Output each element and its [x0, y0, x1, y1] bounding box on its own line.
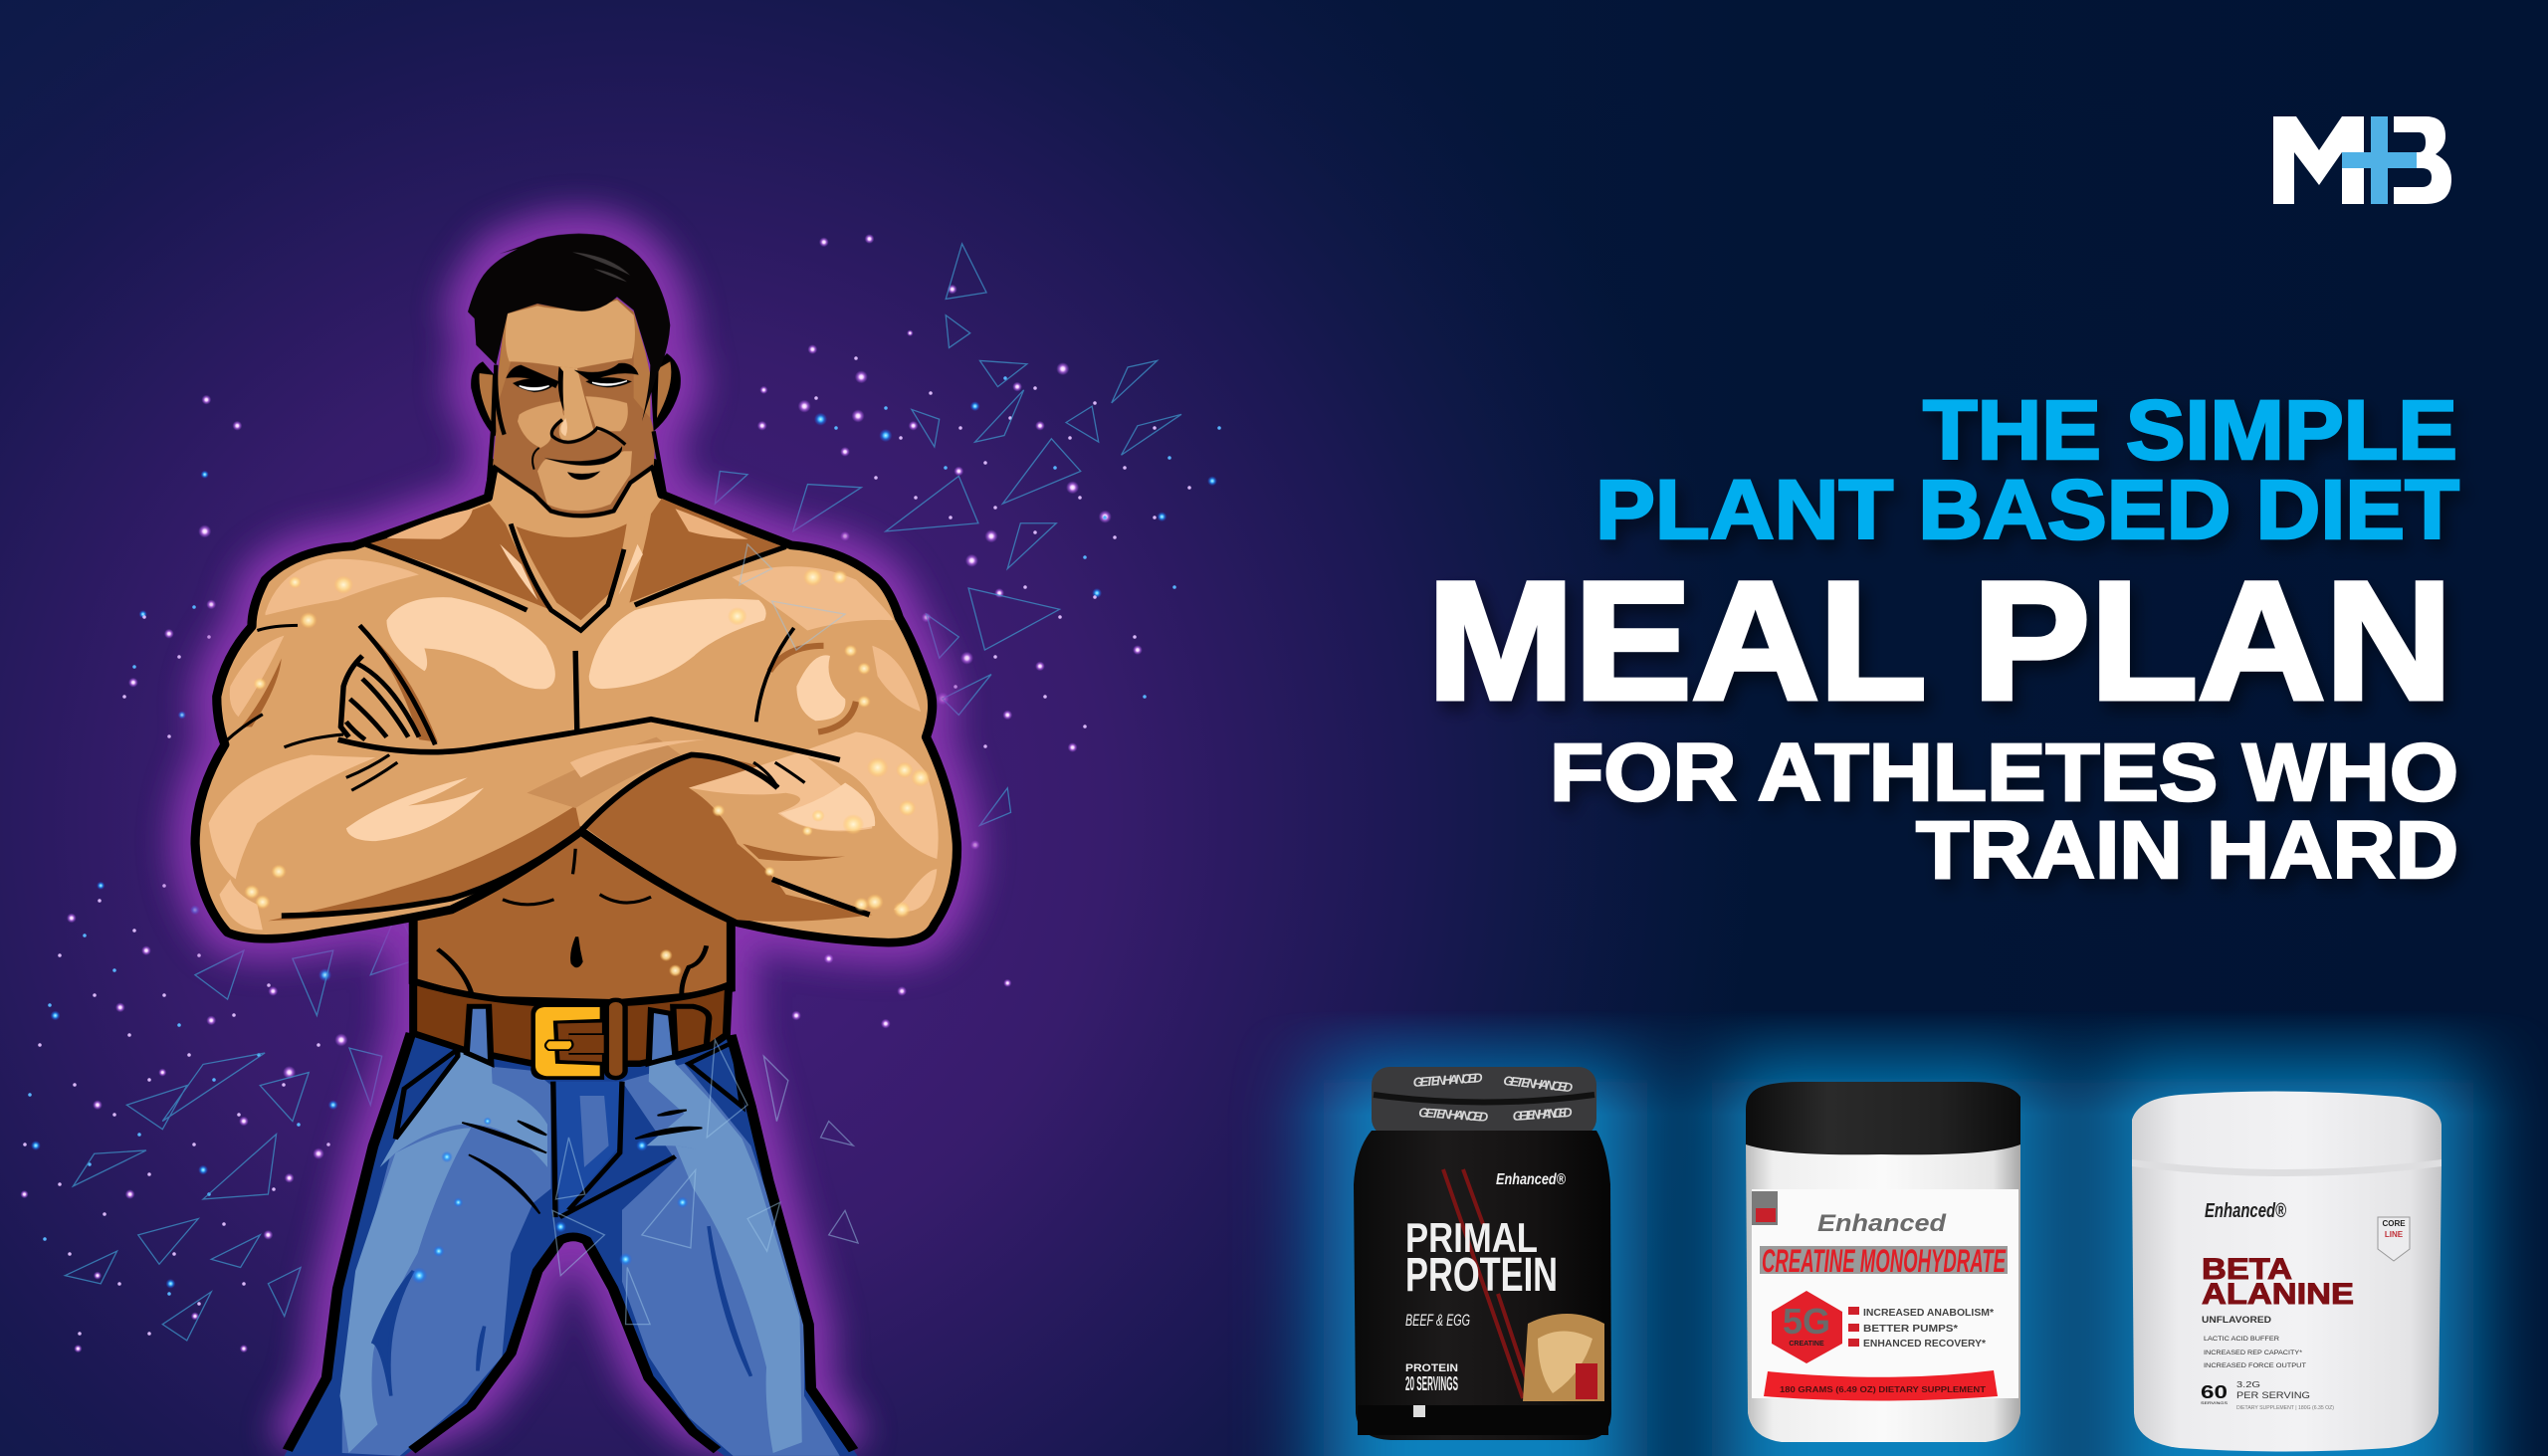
jar 1 label text: PROTEIN	[1405, 1249, 1558, 1302]
left hand fingers	[340, 625, 438, 744]
jar 3 body	[2132, 1091, 2442, 1451]
jar 3 details: 60	[2201, 1382, 2228, 1402]
jar 2 dosage badge	[1772, 1291, 1842, 1363]
face	[493, 299, 655, 516]
jar 3 product name	[2202, 1253, 2354, 1311]
jar 1 label text: BEEF & EGG	[1405, 1311, 1470, 1330]
headline	[1427, 383, 2459, 896]
head	[468, 234, 681, 516]
jar 2 dosage badge: 5G	[1783, 1301, 1830, 1342]
jar 1 label text	[1405, 1171, 1566, 1395]
jar 3 details: DIETARY SUPPLEMENT | 180G (6.35 OZ)	[2236, 1405, 2334, 1411]
brows and eyes	[506, 363, 639, 388]
jar 3 product name: BETA	[2202, 1253, 2292, 1286]
jar 3 details: SERVINGS	[2201, 1400, 2228, 1405]
jar 3 details: INCREASED REP CAPACITY*	[2204, 1351, 2303, 1356]
hair	[468, 234, 670, 421]
jar 3 details: LACTIC ACID BUFFER	[2204, 1337, 2280, 1343]
jar 1 lid: GET ENHANCED	[1418, 1105, 1489, 1125]
logo: MB	[2273, 116, 2451, 204]
jar 2 product name	[1760, 1243, 2008, 1279]
particles: background triangles	[65, 244, 1181, 1341]
jar 2 brand: Enhanced	[1817, 1210, 1947, 1237]
jar 2 product name: CREATINE MONOHYDRATE	[1762, 1243, 2007, 1279]
jar 2 label	[1752, 1189, 2018, 1398]
jar 2 red band: 180 GRAMS (6.49 OZ) DIETARY SUPPLEMENT	[1780, 1385, 1986, 1394]
particles: fine star dust	[25, 358, 1219, 1334]
jar 1 food photo	[1523, 1314, 1604, 1401]
jar 1 red stripes	[1443, 1169, 1533, 1398]
torso	[413, 799, 731, 1003]
jar 2 red band	[1764, 1370, 1998, 1401]
nose	[558, 366, 564, 411]
jar 1 lid: GET ENHANCED	[1503, 1073, 1574, 1095]
jar 1 label text: Enhanced®	[1496, 1171, 1566, 1188]
character glow	[195, 234, 956, 1432]
jar 1 lid: GET ENHANCED	[1512, 1105, 1574, 1124]
pectoral highlights	[386, 597, 766, 689]
arms and chest	[195, 463, 956, 942]
jar 3 details: PER SERVING	[2236, 1390, 2310, 1400]
forearm shadows	[586, 754, 872, 922]
jar 1 lid	[1372, 1067, 1596, 1137]
sparkles on skin	[244, 568, 931, 976]
jeans	[285, 1010, 858, 1456]
upper body	[195, 463, 956, 976]
headline: meal plan: MEAL PLAN	[1427, 546, 2452, 734]
product: beta alanine jar	[2132, 1091, 2442, 1451]
product: creatine monohydrate jar	[1746, 1082, 2020, 1442]
jeans and belt	[285, 799, 858, 1456]
jar 2 dosage badge: CREATINE	[1789, 1341, 1824, 1348]
face side shading	[496, 312, 650, 418]
belt	[413, 981, 729, 1080]
jar 3 details: UNFLAVORED	[2202, 1315, 2272, 1325]
jar 3 details: INCREASED FORCE OUTPUT	[2204, 1363, 2306, 1369]
jar 3 product name: ALANINE	[2202, 1278, 2354, 1311]
jar 1 body	[1354, 1131, 1611, 1440]
jar 2 lid	[1746, 1082, 2020, 1154]
jar 3 core line badge: CORE	[2382, 1219, 2406, 1228]
particles: triangles over character	[552, 544, 858, 1325]
particles: background dots	[20, 234, 1217, 1352]
character	[195, 234, 956, 1456]
jar 2 benefits	[1848, 1307, 1994, 1350]
mouth	[544, 446, 622, 466]
arm creases	[282, 720, 870, 916]
headline: for athletes who: FOR ATHLETES WHO	[1550, 728, 2458, 818]
sideburn and jaw lines	[488, 365, 665, 516]
jar 2 benefits: INCREASED ANABOLISM*	[1863, 1308, 1994, 1319]
particles: dots over jeans	[411, 953, 891, 1284]
jar 3 details	[2201, 1315, 2334, 1411]
headline: plant based diet: PLANT BASED DIET	[1595, 463, 2459, 556]
jar 3 details: 3.2G	[2236, 1380, 2260, 1389]
shoulder highlights	[266, 559, 894, 631]
jar 2 benefits: BETTER PUMPS*	[1863, 1324, 1958, 1335]
headline: the simple: THE SIMPLE	[1923, 383, 2457, 477]
jar 3 brand: Enhanced®	[2205, 1200, 2286, 1222]
jar 2 body	[1746, 1144, 2020, 1442]
trapezius and neck shadow	[368, 499, 783, 610]
product glow	[1324, 1010, 2473, 1456]
jar 1 lid: GET ENHANCED	[1412, 1070, 1484, 1090]
jar 3 core line badge	[2378, 1217, 2410, 1261]
bicep	[796, 655, 845, 721]
jar 3 lid seam	[2132, 1159, 2442, 1176]
jar 2 benefits: ENHANCED RECOVERY*	[1863, 1339, 1986, 1350]
product: primal protein jar	[1354, 1067, 1611, 1440]
jar 3 core line badge: LINE	[2385, 1230, 2404, 1239]
ears	[471, 353, 681, 436]
jar 1 label text: PRIMAL	[1405, 1214, 1538, 1261]
headline: train hard: TRAIN HARD	[1916, 805, 2458, 896]
face light areas	[506, 301, 635, 368]
jar 1 label text: PROTEIN	[1405, 1362, 1458, 1374]
forearm highlights	[209, 754, 376, 879]
jar 1 label text: 20 SERVINGS	[1405, 1373, 1458, 1395]
